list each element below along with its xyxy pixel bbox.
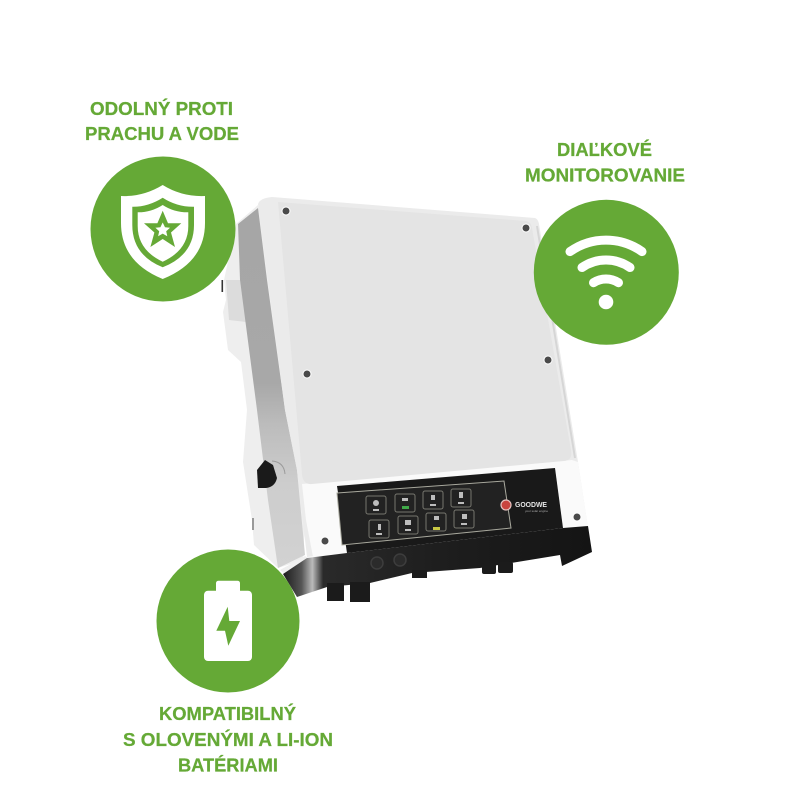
icon: shield with star [121, 185, 205, 279]
rotary switch arrow [272, 461, 285, 474]
heading: battery compatibility: BATÉRIAMI [178, 754, 278, 776]
rotary switch [257, 460, 277, 488]
heading: remote monitoring: DIAĽKOVÉ [557, 139, 652, 160]
light edge by base [280, 556, 308, 573]
inverter lower front [302, 460, 588, 557]
heading: remote monitoring: MONITOROVANIE [525, 164, 685, 186]
heading: remote monitoring [525, 139, 685, 186]
heading: dust and water resistance: PRACHU A VODE [85, 123, 239, 144]
inverter front bezel [258, 197, 588, 557]
heading: dust and water resistance: ODOLNÝ PROTI [90, 98, 233, 119]
GoodWe brand name: GOODWE [515, 502, 547, 509]
icon: battery with bolt [204, 581, 252, 661]
right edge shading [537, 226, 575, 458]
control panel [337, 468, 563, 553]
bracket mark [222, 280, 223, 292]
heading: battery compatibility: KOMPATIBILNÝ [159, 703, 297, 724]
heading: battery compatibility [123, 703, 333, 776]
control panel outline [337, 481, 511, 545]
heading: dust and water resistance [85, 98, 239, 144]
screws [282, 207, 581, 545]
circle: dust and water resistance [90, 156, 236, 302]
round ports [371, 554, 406, 569]
inverter side silhouette [223, 205, 312, 568]
inverter [222, 197, 592, 602]
inverter lid [278, 202, 571, 484]
circle: remote monitoring [534, 200, 679, 345]
green status light [402, 506, 409, 509]
icon: wifi [570, 240, 642, 309]
circle: battery compatibility [156, 550, 300, 692]
inverter grey side band [238, 208, 305, 568]
control buttons [366, 489, 474, 538]
brand tagline: your solar engine [525, 509, 548, 513]
inverter black base [283, 526, 592, 597]
heading: battery compatibility: S OLOVENÝMI A LI-ION [123, 729, 333, 750]
button indicators [373, 492, 467, 535]
GoodWe logo mark [501, 500, 511, 510]
bracket shading [226, 280, 246, 322]
bottom connectors [327, 562, 513, 602]
lower bracket mark [252, 518, 254, 530]
yellow status light [433, 527, 440, 530]
